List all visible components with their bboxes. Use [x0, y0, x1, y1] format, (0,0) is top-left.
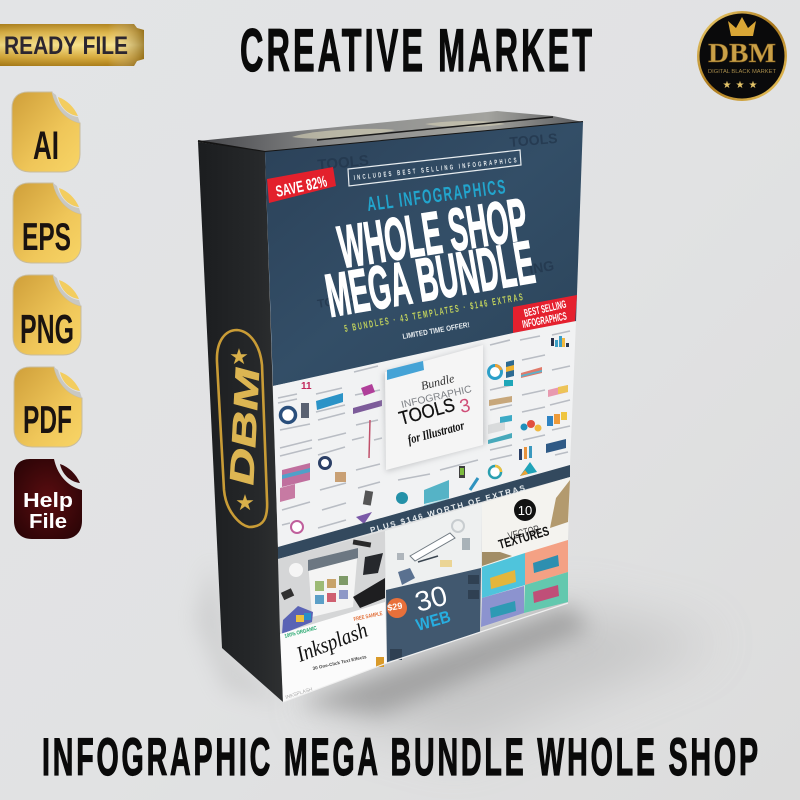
inksplash panel: INKSPLASH — [285, 686, 314, 701]
box front: blue cover panel: WHOLE SHOP — [334, 186, 532, 281]
inksplash panel: Inksplash — [292, 617, 371, 667]
box front: blue cover panel — [265, 122, 583, 386]
icon: AI file: AI — [33, 124, 59, 168]
box side face — [198, 142, 283, 702]
numeral 11: 11 — [301, 381, 312, 392]
ready file banner: READY FILE — [4, 32, 128, 60]
includes label: INCLUDES BEST SELLING INFOGRAPHICS — [353, 158, 517, 182]
faint background pattern text: TOOLS — [316, 291, 359, 311]
mini bar chart — [551, 336, 569, 347]
faint background pattern text: TOOLS — [317, 152, 370, 174]
icon: help file: Help — [23, 490, 73, 512]
box front: blue cover panel: MEGA BUNDLE — [321, 228, 539, 330]
for illustrator: for Illustrator — [406, 417, 467, 447]
inksplash panel: 100% ORGANIC — [284, 625, 318, 640]
inksplash panel: 30 One-Click Text Effects — [312, 654, 367, 671]
phone — [363, 490, 373, 506]
vector textures panel: TEXTURES — [497, 523, 551, 552]
chart: left donut — [280, 408, 296, 422]
colored tiles — [547, 416, 553, 426]
web kit panel — [386, 568, 481, 663]
navy donut — [320, 458, 330, 468]
side DBM emblem: ★ — [235, 490, 255, 515]
list marks — [301, 403, 309, 418]
best selling badge: INFOGRAPHICS — [521, 311, 568, 331]
best selling badge: BEST SELLING — [523, 299, 568, 320]
side DBM emblem: DBM — [224, 362, 267, 490]
icon: PNG file — [13, 275, 81, 355]
inksplash panel — [280, 602, 387, 702]
icon: help file: File — [29, 511, 67, 533]
faint background pattern text: ING — [528, 257, 555, 277]
icon: EPS file: EPS — [22, 216, 71, 259]
right column charts — [396, 336, 569, 511]
product box — [198, 111, 583, 702]
pink blob — [361, 384, 375, 396]
logo: DBM badge: DBM — [708, 38, 776, 68]
best selling badge — [513, 295, 577, 333]
limited offer: LIMITED TIME OFFER! — [402, 320, 470, 341]
tan chart — [335, 472, 346, 482]
logo: DBM badge: DIGITAL BLACK MARKET — [708, 69, 777, 75]
pink blue bars — [282, 463, 310, 487]
icon: PNG file: PNG — [20, 306, 74, 352]
ready file banner — [0, 24, 144, 66]
small bars — [519, 449, 522, 460]
blue ribbon — [387, 361, 424, 380]
pink donut — [291, 521, 303, 533]
side DBM emblem — [217, 330, 267, 527]
faint background pattern text — [316, 130, 558, 311]
subtitle: ALL INFOGRAPHICS — [366, 176, 507, 216]
purple funnel — [356, 512, 372, 524]
vector textures panel — [482, 477, 570, 567]
icon: AI file — [12, 92, 80, 172]
vector textures panel: VECTOR — [507, 524, 541, 543]
icon: EPS file — [13, 183, 81, 263]
infographic collage panel — [273, 321, 576, 547]
icon: PDF file: PDF — [23, 399, 72, 442]
bundle counts: 5 BUNDLES · 43 TEMPLATES · $146 EXTRAS — [343, 291, 524, 334]
bundle script: Bundle — [419, 371, 456, 393]
box bottom edge highlight — [283, 603, 568, 702]
box floor shadow — [195, 560, 720, 750]
price tag: $29 — [387, 601, 403, 613]
colored mockup tiles — [481, 540, 568, 627]
infographic word: INFOGRAPHIC — [400, 384, 473, 411]
faint background pattern text: TOOLS — [509, 130, 558, 150]
timeline stem — [369, 420, 370, 458]
colored band — [353, 400, 382, 414]
numeral 3: 3 — [458, 395, 472, 418]
icon: PDF file — [14, 367, 82, 447]
icon: crown — [728, 17, 756, 36]
tools word: TOOLS — [397, 395, 457, 430]
blue bar chart — [316, 393, 343, 410]
stacked list — [280, 484, 295, 502]
gears — [520, 424, 528, 430]
device illustration panel — [385, 503, 482, 590]
icon: numeral circle: 10 — [518, 503, 532, 518]
extras band — [278, 465, 570, 559]
web kit panel: WEB — [414, 607, 453, 635]
center cover card — [383, 345, 486, 472]
web kit panel: 30 — [412, 580, 450, 618]
icon: help file — [14, 459, 82, 539]
title: CREATIVE MARKET — [240, 17, 592, 85]
inksplash panel: FREE SAMPLE — [353, 610, 384, 623]
small text lines — [278, 331, 570, 528]
box top face — [198, 111, 583, 152]
side DBM emblem: ★ — [229, 344, 249, 369]
save badge — [267, 167, 336, 203]
bottom caption: INFOGRAPHIC MEGA BUNDLE WHOLE SHOP — [42, 728, 758, 787]
tablet — [546, 439, 566, 453]
headline — [321, 186, 539, 330]
logo: DBM badge — [697, 11, 787, 101]
photo mockup panel — [278, 531, 385, 634]
save badge: SAVE 82% — [274, 173, 329, 201]
includes label — [348, 150, 521, 186]
logo: DBM badge: ★★★ — [723, 80, 761, 91]
extras band: PLUS $146 WORTH OF EXTRAS — [369, 483, 527, 535]
